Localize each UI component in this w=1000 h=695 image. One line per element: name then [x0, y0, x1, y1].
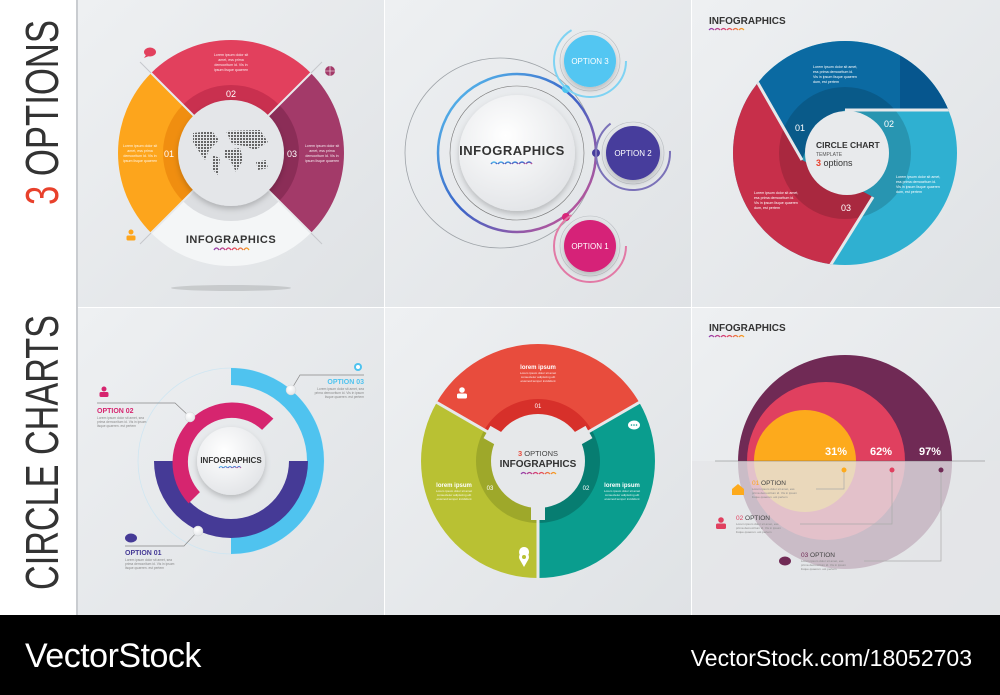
option 02: prima democritum id. Vis in ipsum	[736, 526, 781, 530]
icon: globe	[325, 66, 335, 76]
icon: pin	[519, 547, 529, 567]
option 03: 03 OPTION	[801, 552, 835, 559]
panel 3: pinwheel circle chart: Lorem ipsum dolor sit amet,	[896, 175, 940, 179]
option 01: prima democritum id. Vis in ipsum	[752, 491, 797, 495]
panel 3: pinwheel circle chart	[708, 17, 957, 265]
panel 3: pinwheel circle chart: ess prima democritum id.	[813, 70, 853, 74]
arc option 01	[154, 461, 308, 538]
segment 01 red	[437, 344, 639, 461]
option 01 label: OPTION 01	[125, 550, 162, 557]
option 03 label: OPTION 03	[327, 379, 364, 386]
option 01: 01 OPTION	[752, 480, 786, 487]
panel 5: three segment ring: Lorem ipsum dolor sit amet	[520, 371, 556, 375]
panel 1: segmented ring with world map: democritum id. Vis in	[123, 154, 157, 158]
header: INFOGRAPHICS	[709, 323, 786, 334]
arc option 03	[231, 368, 324, 554]
panel 5: three segment ring: eiusmod tempor incididunt	[436, 497, 472, 501]
option 02: 02 OPTION	[736, 515, 770, 522]
panel 1: segmented ring with world map: 01	[164, 149, 174, 159]
footer bar	[0, 615, 1000, 695]
center circle with world map	[178, 100, 284, 206]
panel 3: pinwheel circle chart: dum, est pertem	[754, 206, 780, 210]
panel 5: three segment ring: Lorem ipsum dolor sit amet	[436, 489, 472, 493]
header: INFOGRAPHICS	[709, 16, 786, 27]
panel 3: pinwheel circle chart: 02	[884, 119, 894, 129]
segment bottom	[151, 153, 311, 266]
panel 6: nested half circles: 31%	[825, 446, 847, 458]
panel 5: three segment ring: lorem ipsum	[520, 365, 556, 371]
option 03 label	[315, 363, 364, 399]
panel 5: three segment ring: eiusmod tempor incididunt	[520, 379, 556, 383]
option 02 label: Lorem ipsum dolor sit amet, sea	[97, 416, 144, 420]
segment 02	[151, 40, 311, 153]
icon: chat	[628, 420, 640, 430]
option 3	[554, 25, 626, 97]
center label	[491, 414, 585, 508]
option 03: Lorem ipsum dolor sit amet, ess	[801, 559, 844, 563]
panel 3: pinwheel circle chart: ess prima democritum id.	[754, 196, 794, 200]
option 1: OPTION 1	[571, 242, 609, 251]
panel 1: segmented ring with world map: ipsum lisque quaeren	[123, 159, 157, 163]
vertical title: circle charts: CIRCLE CHARTS	[16, 315, 68, 590]
option 2	[596, 116, 670, 190]
option 01 label	[125, 534, 175, 570]
panel 6: nested half circles: 62%	[870, 446, 892, 458]
option 03: prima democritum id. Vis in ipsum	[801, 563, 846, 567]
panel 2: bubble options	[405, 25, 670, 282]
icon: person	[126, 230, 136, 240]
icon: chat	[144, 48, 156, 58]
option 03	[779, 552, 846, 571]
panel 1: segmented ring with world map: amet, ess prima	[218, 58, 244, 62]
option 1	[554, 210, 626, 282]
panel 5: three segment ring: 01	[535, 404, 542, 410]
panel 1: segmented ring with world map: democritum id. Vis in	[305, 154, 339, 158]
center label: 3 OPTIONS	[518, 449, 558, 458]
center circle	[459, 95, 575, 211]
panel 5: three segment ring: consectetur adipiscing elit	[437, 493, 471, 497]
option 01 label: prima democritum id. Vis in ipsum	[125, 562, 175, 566]
arc option 02	[172, 402, 273, 503]
panel 3: pinwheel circle chart: Vis in ipsum lisque quaeren	[754, 201, 798, 205]
panel 5: three segment ring: consectetur adipiscing elit	[521, 375, 555, 379]
center label: TEMPLATE	[816, 152, 843, 158]
panel 5: three segment ring: Lorem ipsum dolor sit amet	[604, 489, 640, 493]
option 03: lisque quaeren. est pertem	[801, 567, 837, 571]
center label	[805, 111, 889, 195]
panel 5: three segment ring: 03	[487, 486, 494, 492]
panel 3: pinwheel circle chart: ess prima democritum id.	[896, 180, 936, 184]
option 02 label: lisque quaeren. est pertem	[97, 424, 136, 428]
panel 1: segmented ring with world map: Lorem ipsum dolor sit	[305, 144, 339, 148]
panel 3: pinwheel circle chart: 03	[841, 203, 851, 213]
panel 6: nested half circles	[692, 323, 1000, 615]
panel 1: segmented ring with world map	[118, 40, 344, 291]
segment 03	[231, 73, 344, 233]
panel 3: pinwheel circle chart: Vis in ipsum lisque quaeren	[896, 185, 940, 189]
panel 3: pinwheel circle chart: Lorem ipsum dolor sit amet,	[754, 191, 798, 195]
panel 5: three segment ring: eiusmod tempor incididunt	[604, 497, 640, 501]
option 02	[716, 515, 781, 534]
panel 1: segmented ring with world map: ipsum lisque quaeren	[305, 159, 339, 163]
center circle	[197, 427, 265, 495]
option 01: Lorem ipsum dolor sit amet, ess	[752, 487, 795, 491]
option 01 label: lisque quaeren. est pertem	[125, 566, 164, 570]
panel 1: segmented ring with world map: 03	[287, 149, 297, 159]
footer bar: VectorStock	[25, 637, 202, 675]
icon: person	[457, 387, 467, 398]
footer bar: VectorStock.com/18052703	[691, 645, 972, 671]
panel 1: segmented ring with world map: amet, ess prima	[309, 149, 335, 153]
option 03 label: Lorem ipsum dolor sit amet, sea	[317, 387, 364, 391]
panel 4: concentric arcs	[97, 363, 364, 570]
segment 03 green	[421, 402, 538, 578]
panel 1: segmented ring with world map: democritum id. Vis in	[214, 63, 248, 67]
panel 3: pinwheel circle chart: dum, est pertem	[813, 80, 839, 84]
panel 6: nested half circles: 97%	[919, 446, 941, 458]
option 01 label: Lorem ipsum dolor sit amet, sea	[125, 558, 172, 562]
option 02: Lorem ipsum dolor sit amet, ess	[736, 522, 779, 526]
panel 5: three segment ring: lorem ipsum	[604, 483, 640, 489]
option 02 label	[97, 386, 147, 428]
panel 1: segmented ring with world map: INFOGRAPHICS	[186, 234, 276, 246]
panel 1: segmented ring with world map: Lorem ipsum dolor sit	[214, 53, 248, 57]
option 3: OPTION 3	[571, 57, 609, 66]
center label: INFOGRAPHICS	[500, 459, 577, 470]
panel 3: pinwheel circle chart: Lorem ipsum dolor sit amet,	[813, 65, 857, 69]
panel 5: three segment ring: 02	[583, 486, 590, 492]
panel 5: three segment ring: consectetur adipiscing elit	[605, 493, 639, 497]
option 02: lisque quaeren. est pertem	[736, 530, 772, 534]
panel 1: segmented ring with world map: ipsum lisque quaeren	[214, 68, 248, 72]
center circle: INFOGRAPHICS	[200, 456, 262, 465]
center label: CIRCLE CHART	[816, 140, 881, 150]
panel 5: three segment ring: lorem ipsum	[436, 483, 472, 489]
panel 1: segmented ring with world map: Lorem ipsum dolor sit	[123, 144, 157, 148]
center circle: INFOGRAPHICS	[459, 143, 565, 158]
option 2: OPTION 2	[614, 149, 652, 158]
panel 1: segmented ring with world map: amet, ess prima	[127, 149, 153, 153]
segment 01	[118, 73, 231, 233]
panel 3: pinwheel circle chart: 01	[795, 123, 805, 133]
option 03 label: lisque quaeren. est pertem	[325, 395, 364, 399]
option 03 label: prima democritum id. Vis in ipsum	[315, 391, 364, 395]
option 01: lisque quaeren. est pertem	[752, 495, 788, 499]
option 02 label: OPTION 02	[97, 408, 134, 415]
panel 5: three segment ring	[421, 344, 655, 580]
panel 3: pinwheel circle chart: Vis in ipsum lisque quaeren	[813, 75, 857, 79]
option 01	[732, 480, 797, 499]
center label: 3 options	[816, 158, 853, 168]
left strip	[0, 0, 78, 615]
option 02 label: prima democritum id. Vis in ipsum	[97, 420, 147, 424]
segment 02 teal	[538, 402, 655, 578]
panel 3: pinwheel circle chart: dum, est pertem	[896, 190, 922, 194]
panel 1: segmented ring with world map: 02	[226, 89, 236, 99]
